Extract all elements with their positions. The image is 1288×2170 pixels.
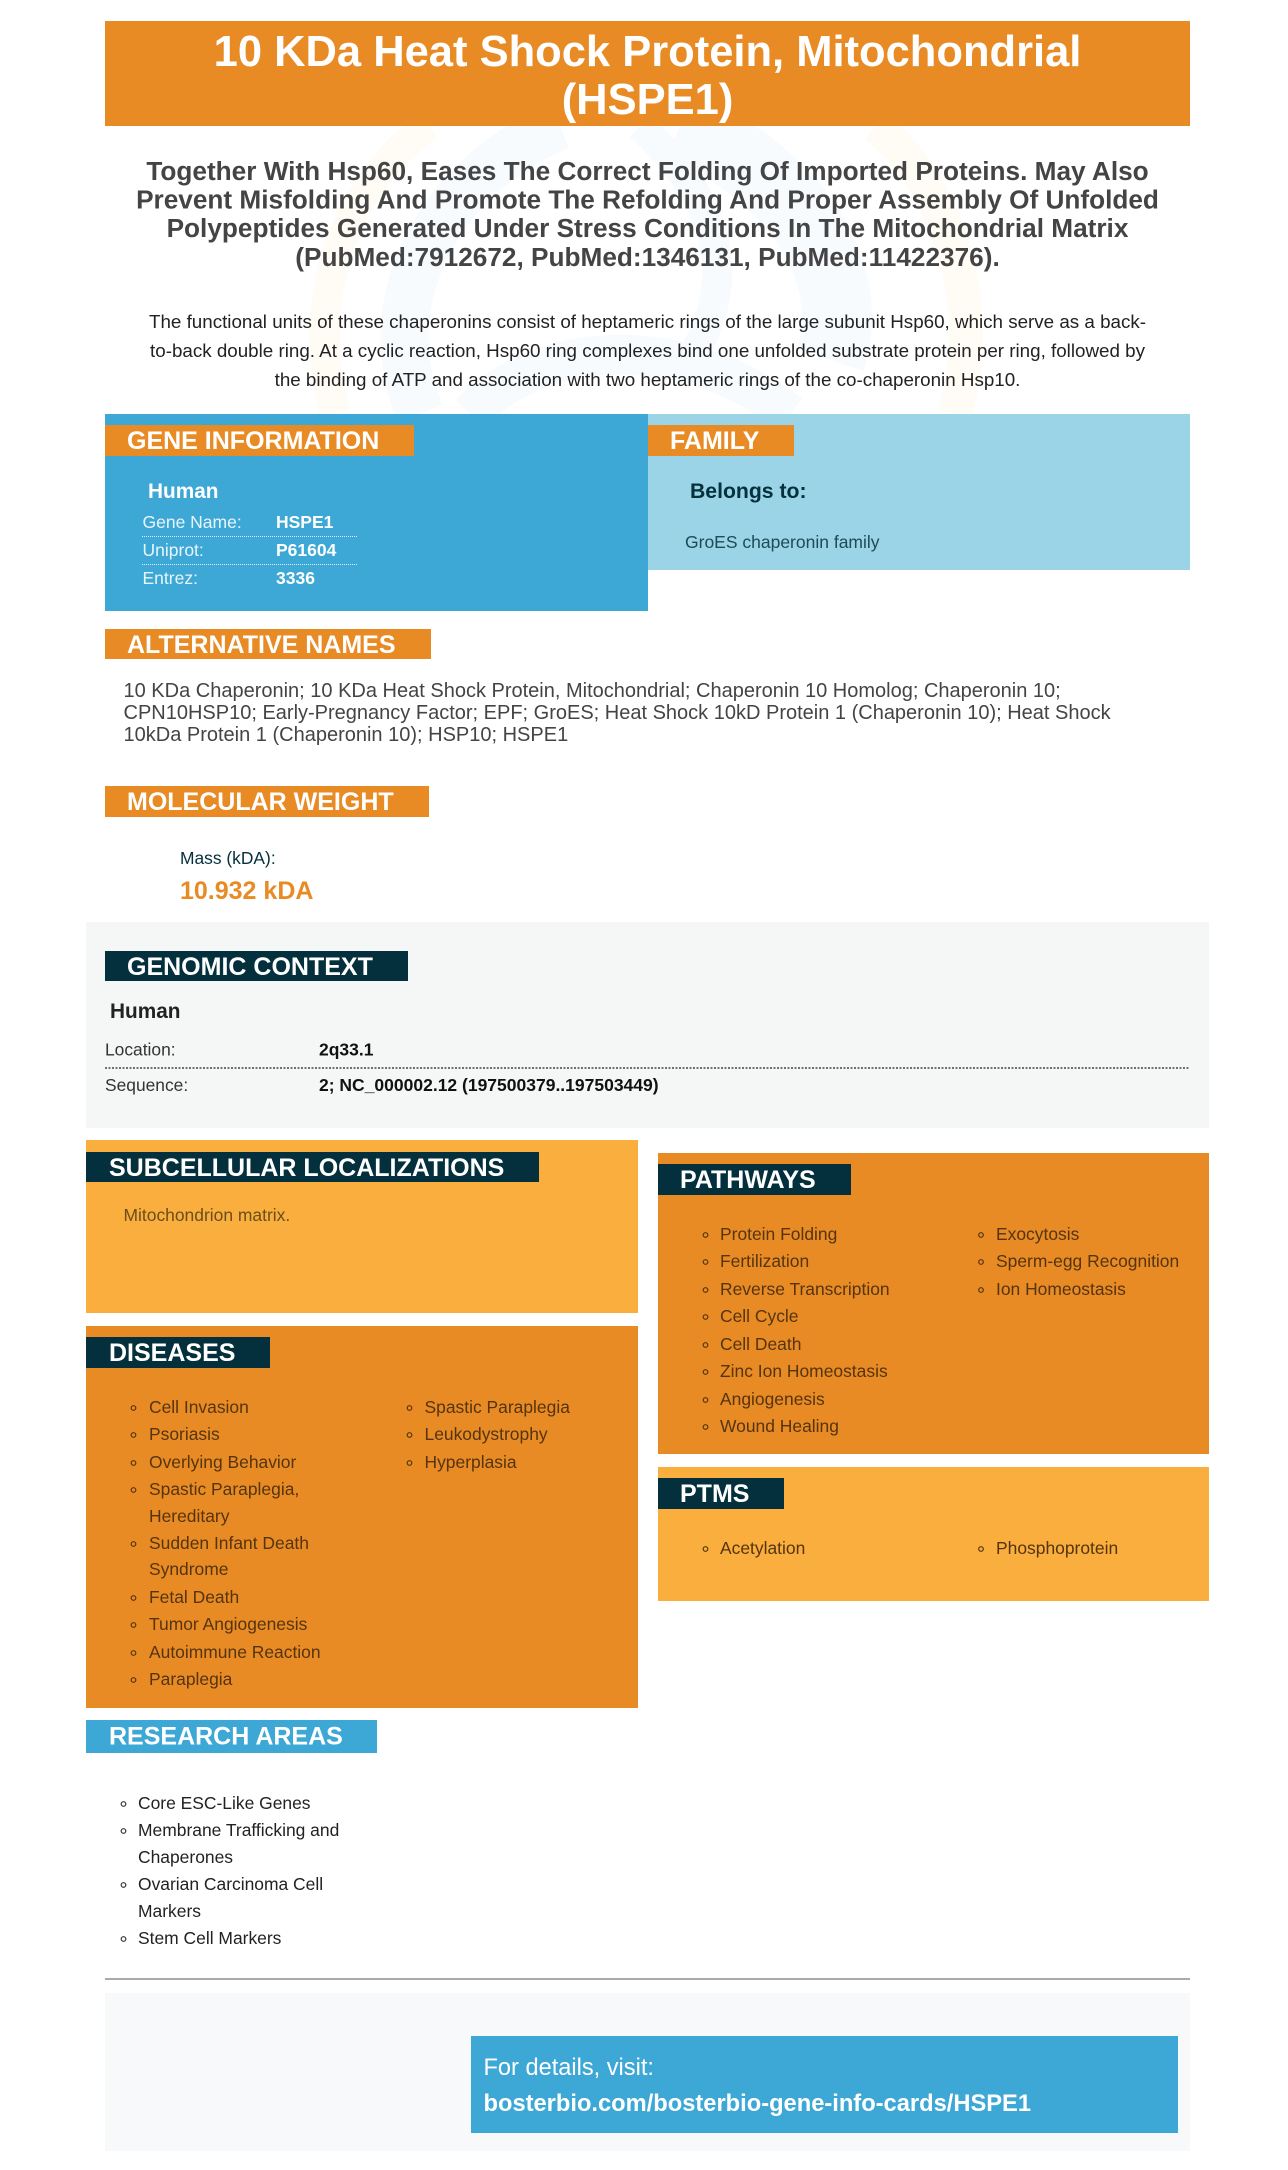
family text: GroES chaperonin family [685, 532, 880, 552]
title banner [105, 21, 1190, 126]
research areas list: Markers [138, 1901, 201, 1921]
mass value [180, 848, 313, 905]
research areas list [121, 1793, 339, 1948]
title banner: (HSPE1) [562, 76, 733, 124]
callout: details link [471, 2036, 1178, 2133]
pathways list column 1: Angiogenesis [720, 1389, 825, 1409]
PTMs list: Acetylation [720, 1538, 805, 1558]
pathways list column 2 [979, 1224, 1179, 1299]
title banner: 10 KDa Heat Shock Protein, Mitochondrial [214, 28, 1081, 76]
section: alternative names [105, 629, 1112, 746]
alternative names text [124, 680, 1112, 746]
panel: family [648, 414, 1190, 570]
research areas list: Membrane Trafficking and [138, 1820, 339, 1840]
location and sequence table: Sequence: [105, 1075, 188, 1095]
diseases list column 1: Overlying Behavior [149, 1452, 297, 1472]
diseases list column 2: Spastic Paraplegia [424, 1397, 570, 1417]
pathways list column 2: Exocytosis [996, 1224, 1080, 1244]
heading: family [648, 425, 794, 456]
diseases list column 2: Hyperplasia [424, 1452, 517, 1472]
research areas list: Chaperones [138, 1847, 233, 1867]
panel: genomic context [86, 922, 1209, 1128]
mass value: 10.932 kDA [180, 877, 313, 905]
gene identifiers table: Gene Name: [142, 512, 242, 532]
diseases list column 1: Sudden Infant Death [149, 1533, 309, 1553]
heading: genomic context: GENOMIC CONTEXT [127, 953, 373, 981]
pathways list column 1: Zinc Ion Homeostasis [720, 1361, 888, 1381]
diseases list column 1: Fetal Death [149, 1587, 239, 1607]
subtitle: protein function: Polypeptides Generated Under Stress Conditions In The Mitochondrial Matrix [167, 213, 1129, 243]
diseases list column 1 [131, 1397, 321, 1689]
pathways list column 1: Reverse Transcription [720, 1279, 890, 1299]
subtitle: protein function: Together With Hsp60, Eases The Correct Folding Of Imported Proteins. May Also [146, 156, 1149, 186]
heading: subcellular localizations: SUBCELLULAR LOCALIZATIONS [109, 1154, 504, 1182]
panel: gene information [105, 414, 648, 611]
research areas list: Ovarian Carcinoma Cell [138, 1874, 323, 1894]
alternative names text: CPN10HSP10; Early-Pregnancy Factor; EPF; GroES; Heat Shock 10kD Protein 1 (Chaperonin 10); Heat Shock [124, 702, 1112, 724]
section: research areas [86, 1720, 377, 1948]
alternative names text: 10kDa Protein 1 (Chaperonin 10); HSP10; HSPE1 [124, 724, 568, 746]
description paragraph: to-back double ring. At a cyclic reaction, Hsp60 ring complexes bind one unfolded substrate protein per ring, followed by [150, 340, 1146, 361]
heading: diseases [86, 1337, 270, 1368]
diseases list column 1: Psoriasis [149, 1424, 220, 1444]
family text [685, 480, 880, 552]
pathways list column 1 [703, 1224, 890, 1436]
diseases list column 1: Syndrome [149, 1559, 228, 1579]
gene identifiers table: Entrez: [142, 568, 198, 588]
panel: diseases [86, 1326, 638, 1708]
description paragraph: The functional units of these chaperonins consist of heptameric rings of the large subunit Hsp60, which serve as a back- [149, 311, 1146, 332]
pathways list column 1: Wound Healing [720, 1416, 839, 1436]
subtitle: protein function [136, 156, 1159, 272]
diseases list column 1: Tumor Angiogenesis [149, 1614, 308, 1634]
diseases list column 1: Cell Invasion [149, 1397, 249, 1417]
PTMs list [703, 1538, 1118, 1558]
gene identifiers table: HSPE1 [276, 512, 334, 532]
location and sequence table: 2q33.1 [319, 1040, 374, 1060]
pathways list column 1: Cell Cycle [720, 1306, 798, 1326]
heading: research areas: RESEARCH AREAS [109, 1722, 343, 1750]
gene identifiers table [142, 480, 357, 588]
diseases list column 1: Hereditary [149, 1506, 230, 1526]
heading: pathways [658, 1164, 851, 1195]
pathways list column 1: Fertilization [720, 1251, 809, 1271]
heading: PTMs: PTMS [680, 1480, 749, 1508]
gene identifiers table: Uniprot: [142, 540, 204, 560]
pathways list column 1: Protein Folding [720, 1224, 837, 1244]
heading: molecular weight: MOLECULAR WEIGHT [127, 788, 394, 816]
heading: pathways: PATHWAYS [680, 1166, 816, 1194]
mass value: Mass (kDA): [180, 848, 276, 868]
heading: alternative names: ALTERNATIVE NAMES [127, 631, 396, 659]
heading: PTMs [658, 1478, 784, 1509]
subtitle: protein function: Prevent Misfolding And Promote The Refolding And Proper Assembly Of Unfolded [136, 184, 1159, 214]
alternative names text: 10 KDa Chaperonin; 10 KDa Heat Shock Protein, Mitochondrial; Chaperonin 10 Homolog; Chaperonin 10; [124, 680, 1061, 702]
diseases list column 1: Paraplegia [149, 1669, 233, 1689]
location and sequence table [105, 1000, 1190, 1095]
diseases list column 2 [407, 1397, 570, 1472]
description paragraph [149, 311, 1146, 390]
research areas list: Stem Cell Markers [138, 1928, 282, 1948]
diseases list column 2: Leukodystrophy [424, 1424, 548, 1444]
gene identifiers table: 3336 [276, 568, 315, 588]
footer panel [105, 1993, 1190, 2151]
panel: pathways [658, 1153, 1209, 1454]
heading: family: FAMILY [670, 427, 760, 455]
location and sequence table: Location: [105, 1040, 176, 1060]
description paragraph: the binding of ATP and association with two heptameric rings of the co-chaperonin Hsp10. [275, 369, 1020, 390]
pathways list column 2: Ion Homeostasis [996, 1279, 1126, 1299]
panel: subcellular localizations [86, 1140, 638, 1313]
heading: diseases: DISEASES [109, 1339, 235, 1367]
gene identifiers table: Human [148, 480, 218, 503]
diseases list column 1: Spastic Paraplegia, [149, 1479, 299, 1499]
heading: research areas [86, 1720, 377, 1753]
panel: PTMs [658, 1467, 1209, 1601]
location and sequence table: Human [110, 1000, 180, 1023]
heading: gene information: GENE INFORMATION [127, 427, 379, 455]
PTMs list: Phosphoprotein [996, 1538, 1118, 1558]
diseases list column 1: Autoimmune Reaction [149, 1642, 321, 1662]
location and sequence table: 2; NC_000002.12 (197500379..197503449) [319, 1075, 659, 1095]
callout: details link: bosterbio.com/bosterbio-gene-info-cards/HSPE1 [484, 2091, 1031, 2117]
research areas list: Core ESC-Like Genes [138, 1793, 311, 1813]
watermark logo [325, 126, 966, 414]
gene identifiers table: P61604 [276, 540, 337, 560]
pathways list column 2: Sperm-egg Recognition [996, 1251, 1179, 1271]
subtitle: protein function: (PubMed:7912672, PubMed:1346131, PubMed:11422376). [295, 242, 1000, 272]
family text: Belongs to: [690, 480, 807, 503]
section: molecular weight [105, 786, 429, 905]
pathways list column 1: Cell Death [720, 1334, 801, 1354]
localization text: Mitochondrion matrix. [124, 1205, 290, 1225]
callout: details link: For details, visit: [484, 2055, 654, 2081]
